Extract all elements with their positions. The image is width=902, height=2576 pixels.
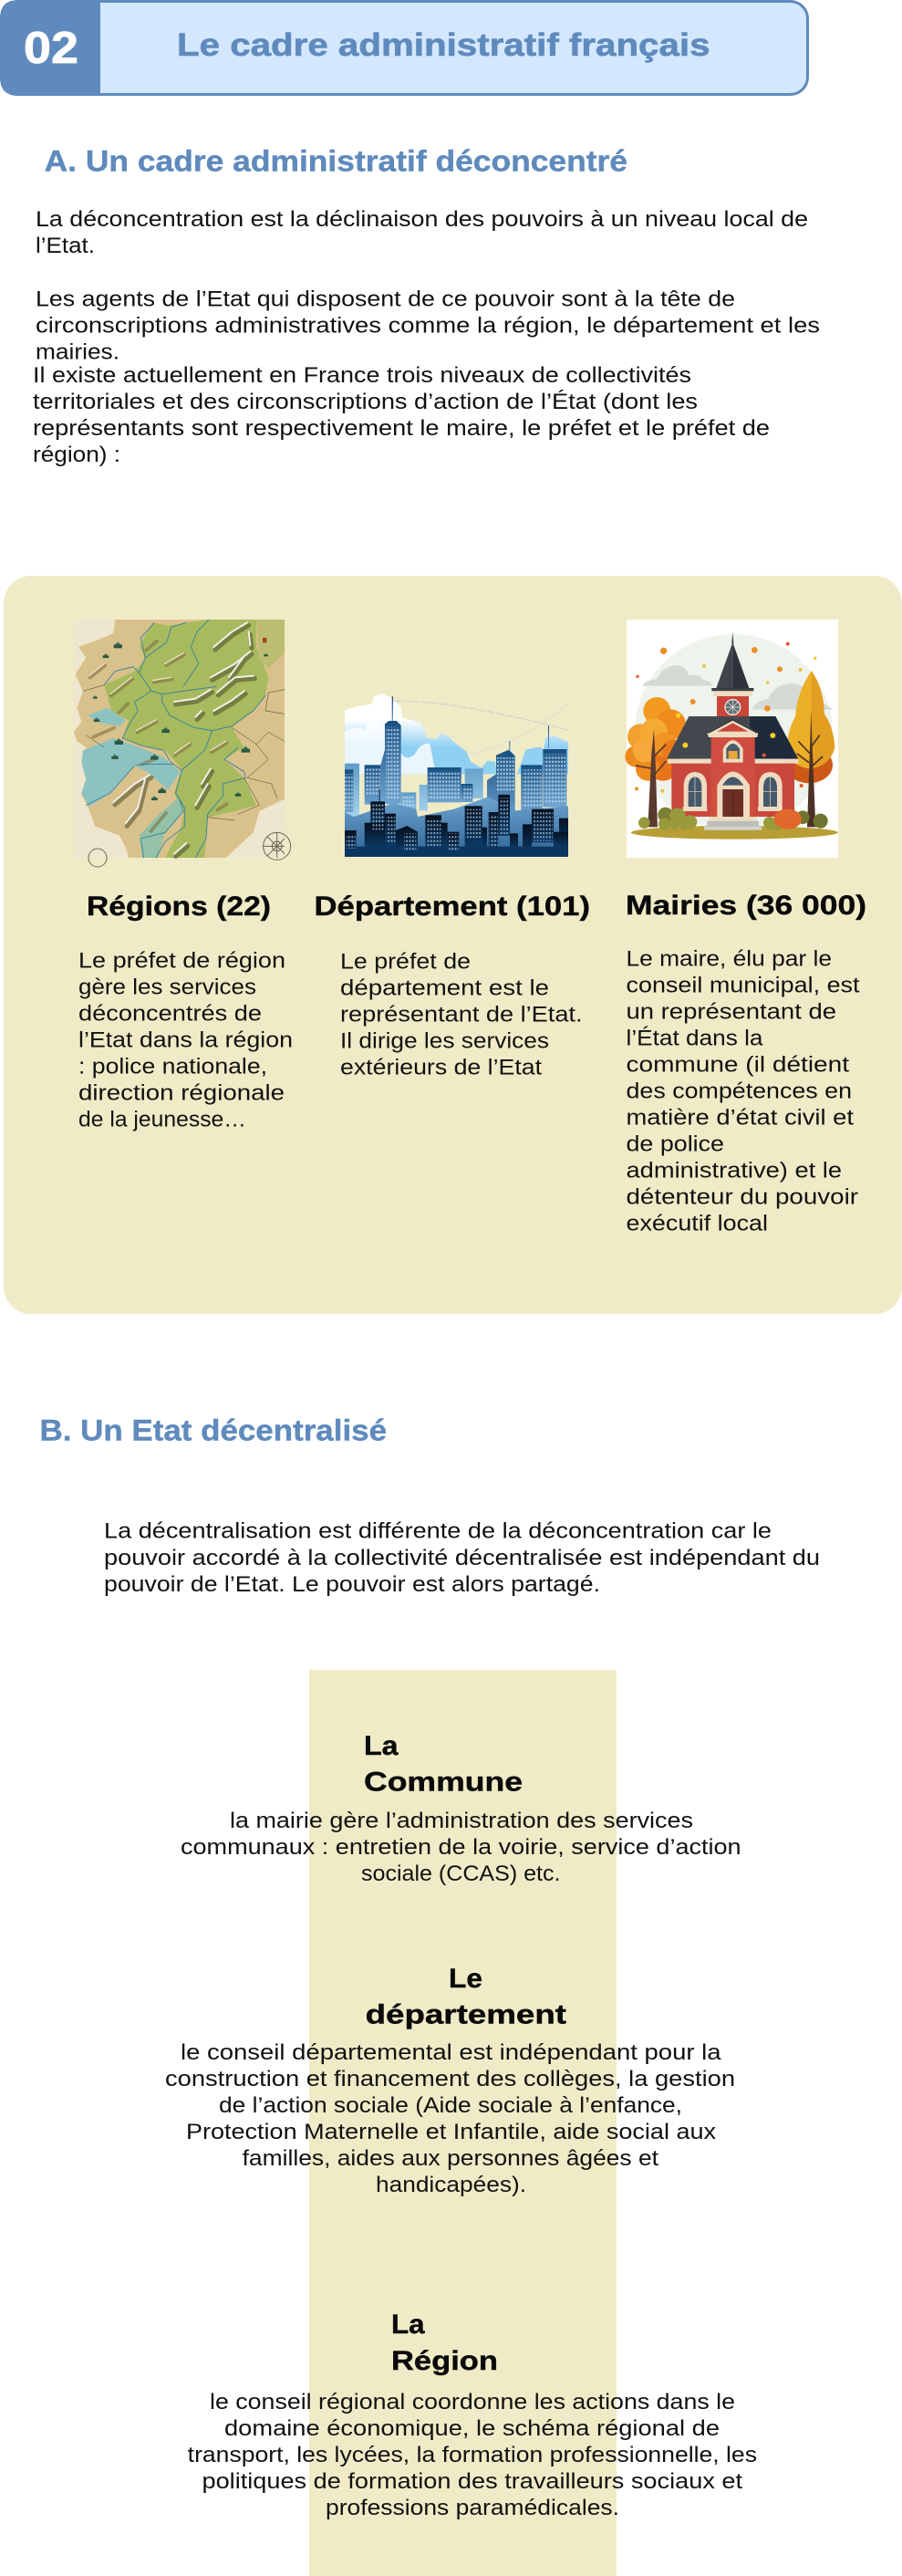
- column: Mairies: [626, 891, 866, 1236]
- text block: intro section A: La déconcentration est la déclinaison des pouvoirs à un niveau local de: [36, 207, 808, 232]
- column: Mairies: l’État dans la: [626, 1026, 763, 1050]
- block: Le département: [165, 1964, 735, 2197]
- falling leaves: [635, 642, 816, 793]
- block: La Commune: la mairie gère l’administration des services: [230, 1809, 693, 1833]
- text block: intro section A: l’Etat.: [36, 234, 95, 258]
- column: Département: extérieurs de l’Etat: [340, 1055, 542, 1079]
- image: relief map: [74, 620, 291, 867]
- block: Le département: handicapées).: [376, 2173, 526, 2197]
- text block: intro section A: territoriales et des circonscriptions d’action de l’État (dont les: [33, 390, 698, 414]
- column: Régions: Le préfet de région: [78, 949, 285, 974]
- column: Mairies: détenteur du pouvoir: [626, 1184, 858, 1209]
- boundaries: [83, 685, 285, 820]
- column: Mairies: administrative) et le: [626, 1158, 842, 1183]
- text block: intro section A: circonscriptions administratives comme la région, le département et les: [36, 314, 820, 338]
- text block: intro section B: pouvoir accordé à la collectivité décentralisée est indépendant du: [104, 1546, 820, 1570]
- heading: section B: B. Un Etat décentralisé: [40, 1414, 387, 1447]
- column: Mairies: conseil municipal, est: [626, 973, 860, 997]
- column: Régions: Régions (22): [87, 892, 271, 922]
- panel: three levels: [4, 576, 902, 1314]
- rivers: [86, 620, 265, 858]
- text block: intro section A: Les agents de l’Etat qui disposent de ce pouvoir sont à la tête de: [36, 287, 735, 312]
- column: Régions: déconcentrés de: [78, 1002, 262, 1027]
- text block: intro section A: [33, 207, 820, 467]
- column: Régions: : police nationale,: [78, 1055, 267, 1079]
- column: Département: département est le: [340, 975, 549, 1000]
- block: Le département: Protection Maternelle et Infantile, aide social aux: [186, 2120, 716, 2144]
- column: Département: Le préfet de: [340, 949, 471, 974]
- block: La Région: professions paramédicales.: [326, 2496, 619, 2520]
- block: La Région: domaine économique, le schéma régional de: [224, 2416, 720, 2441]
- text block: intro section A: région) :: [33, 443, 120, 467]
- column: Régions: de la jeunesse…: [78, 1108, 246, 1132]
- block: La Région: politiques de formation des travailleurs sociaux et: [202, 2469, 742, 2494]
- column: Régions: direction régionale: [78, 1081, 285, 1106]
- block: Le département: le conseil départemental est indépendant pour la: [181, 2040, 721, 2065]
- section number: 02: [24, 24, 78, 73]
- column: Mairies: de police: [626, 1132, 724, 1156]
- column: Régions: gère les services: [78, 975, 256, 1000]
- column: Régions: [78, 892, 293, 1132]
- block: La Région: transport, les lycées, la formation professionnelle, les: [188, 2443, 757, 2467]
- text block: intro section A: Il existe actuellement en France trois niveaux de collectivités: [33, 363, 691, 388]
- text block: intro section B: [104, 1519, 820, 1597]
- header banner: [0, 0, 808, 96]
- block: La Région: [188, 2310, 757, 2520]
- block: La Région: Région: [391, 2346, 498, 2376]
- block: La Commune: [181, 1731, 741, 1886]
- column: Département: représentant de l’Etat.: [340, 1002, 582, 1027]
- column: Département: Département (101): [314, 892, 590, 922]
- ridges shadow: [115, 625, 254, 857]
- block: Le département: de l’action sociale (Aide sociale à l’enfance,: [219, 2093, 682, 2118]
- right tree: [785, 746, 833, 783]
- block: Le département: Le: [449, 1964, 482, 1994]
- text block: intro section B: pouvoir de l’Etat. Le pouvoir est alors partagé.: [104, 1572, 600, 1597]
- block: La Commune: communaux : entretien de la voirie, service d’action: [181, 1835, 741, 1860]
- text block: intro section B: La décentralisation est différente de la déconcentration car le: [104, 1519, 772, 1544]
- block: Le département: familles, aides aux personnes âgées et: [243, 2146, 658, 2171]
- left tree: [625, 697, 686, 781]
- column: Département: Il dirige les services: [340, 1028, 549, 1053]
- column: Régions: l’Etat dans la région: [78, 1028, 293, 1053]
- main title: Le cadre administratif français: [177, 27, 710, 63]
- column: Mairies: matière d’état civil et: [626, 1105, 854, 1130]
- column: Mairies: commune (il détient: [626, 1052, 849, 1077]
- heading: section A: A. Un cadre administratif déconcentré: [45, 144, 627, 177]
- block: Le département: construction et financement des collèges, la gestion: [165, 2067, 735, 2091]
- block: La Commune: La: [364, 1731, 399, 1761]
- block: La Commune: Commune: [364, 1768, 523, 1798]
- text block: intro section A: représentants sont respectivement le maire, le préfet et le préfet de: [33, 416, 770, 441]
- column: Mairies: Le maire, élu par le: [626, 946, 832, 971]
- image: city skyline: [345, 694, 568, 857]
- block: Le département: département: [366, 2000, 566, 2030]
- bushes and pumpkin: [638, 808, 828, 830]
- church: [731, 631, 733, 644]
- block: La Commune: sociale (CCAS) etc.: [361, 1862, 560, 1886]
- ridges snow: [113, 622, 254, 854]
- block: La Région: La: [391, 2310, 425, 2340]
- block: La Région: le conseil régional coordonne les actions dans le: [210, 2390, 735, 2414]
- image: town hall: [625, 620, 838, 858]
- column: Mairies: exécutif local: [626, 1211, 768, 1236]
- column: Mairies: Mairies (36 000): [626, 891, 866, 921]
- column: Mairies: des compétences en: [626, 1079, 852, 1103]
- column: Département: [314, 892, 590, 1079]
- text block: intro section A: mairies.: [36, 339, 119, 365]
- background strip: [309, 1670, 617, 2576]
- column: Mairies: un représentant de: [626, 999, 836, 1024]
